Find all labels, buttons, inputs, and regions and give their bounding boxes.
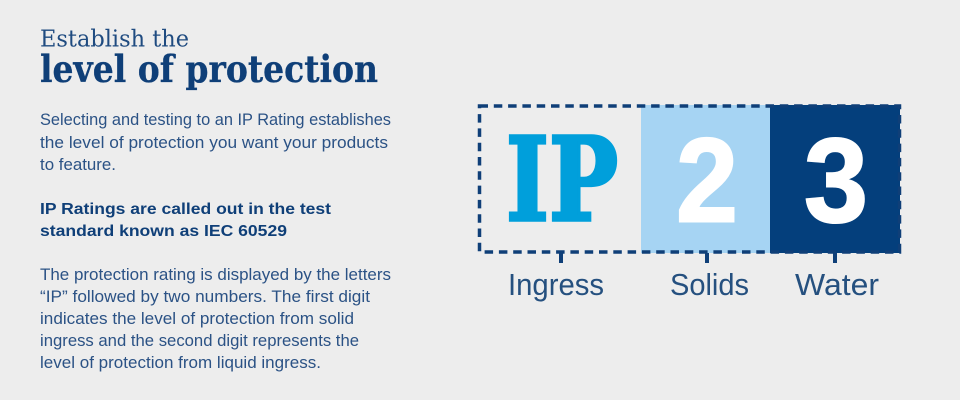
label: Ingress: Ingress [508,267,604,302]
explanation paragraph: The protection rating is displayed by the letters [40,266,391,284]
digit 2: 2 [676,114,738,248]
explanation paragraph: “IP” followed by two numbers. The first digit [40,288,370,306]
title: level of protection [40,47,378,91]
label: Solids: Solids [670,267,749,302]
tick: water [833,253,837,263]
bold callout: IEC 60529: IP Ratings are called out in the test [40,201,332,218]
diagram: IP23 rating [480,105,900,302]
title: Establish the [40,26,189,52]
IP letters: IP [506,113,618,248]
explanation paragraph: level of protection from liquid ingress. [40,354,321,372]
explanation paragraph: ingress and the second digit represents the [40,332,359,350]
water panel [770,105,900,253]
explanation paragraph [40,266,391,372]
explanation paragraph: indicates the level of protection from solid [40,310,354,328]
intro paragraph [40,111,391,174]
bold callout: IEC 60529 [40,201,332,240]
bold callout: IEC 60529: standard known as IEC 60529 [40,223,287,240]
digit 3: 3 [804,114,868,248]
dashed outline [480,106,900,252]
label: Water: Water [795,267,879,302]
tick: solids [705,253,709,263]
intro paragraph: to feature. [40,156,116,174]
tick: ingress [559,253,563,263]
intro paragraph: the level of protection you want your products [40,134,388,152]
solids panel [641,105,770,253]
title [40,26,378,91]
intro paragraph: Selecting and testing to an IP Rating establishes [40,111,391,129]
